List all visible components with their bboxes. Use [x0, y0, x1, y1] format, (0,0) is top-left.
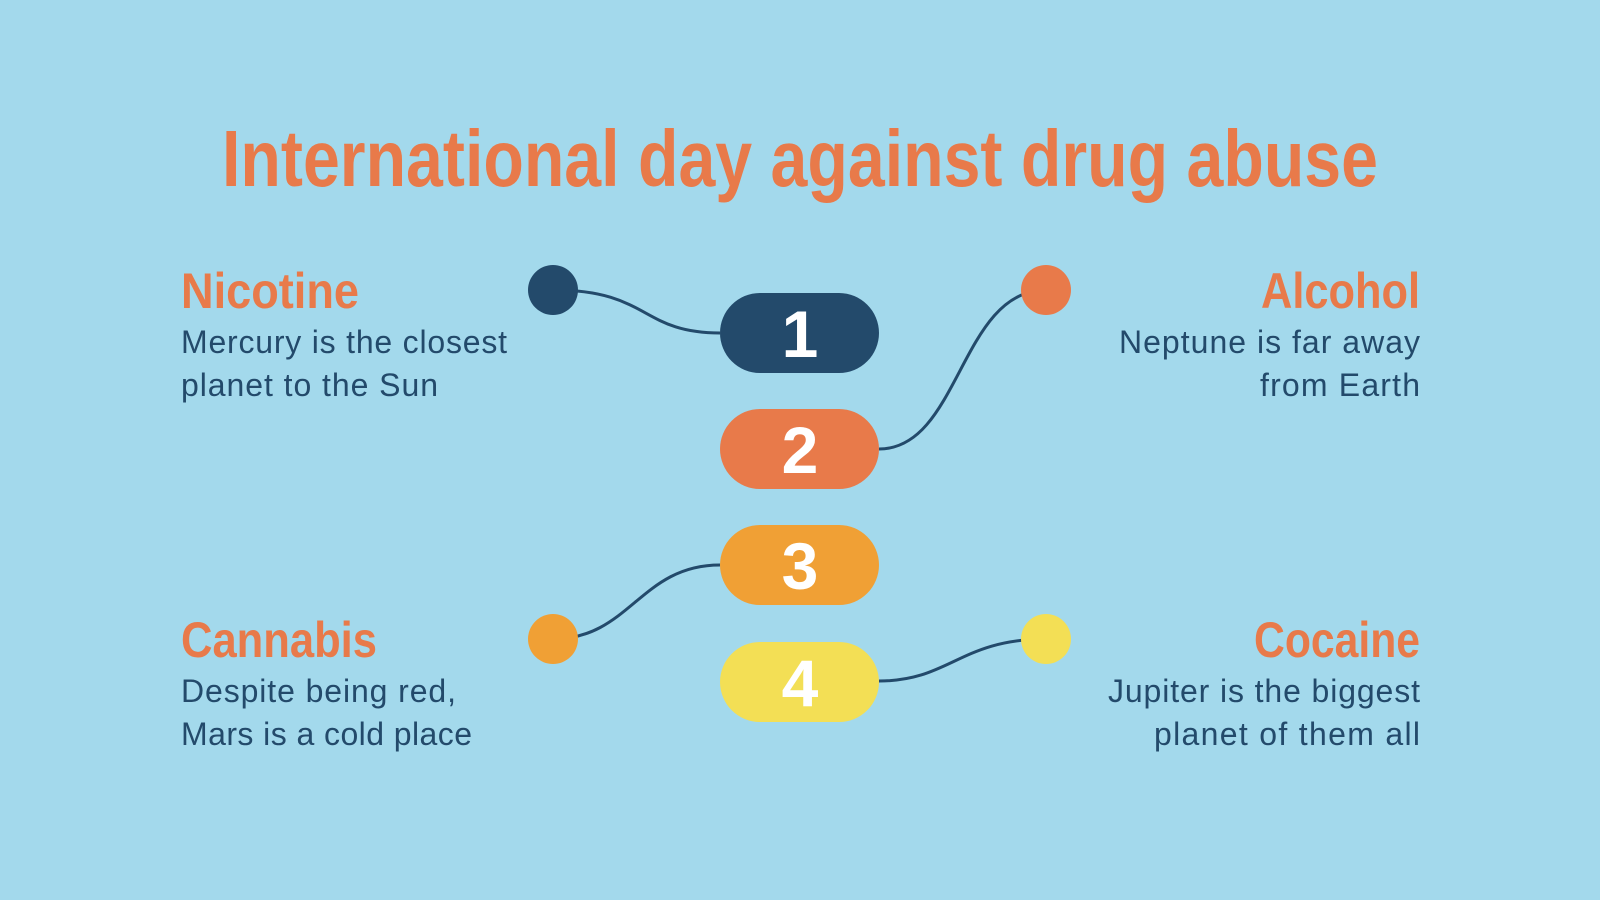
text block: alcohol — [1119, 263, 1420, 403]
text block: cocaine — [1108, 612, 1420, 752]
pill 3 — [720, 525, 879, 605]
text block: cocaine: planet of them all — [1154, 716, 1420, 752]
pill 2: 2 — [782, 413, 818, 487]
text block: alcohol: Neptune is far away — [1119, 324, 1420, 360]
dot: alcohol — [1021, 265, 1071, 315]
pill 2 — [720, 409, 879, 489]
text block: nicotine: Mercury is the closest — [181, 324, 507, 360]
text block: cannabis: Mars is a cold place — [181, 716, 472, 752]
connector: nicotine — [553, 290, 720, 333]
dot: cocaine — [1021, 614, 1071, 664]
pill 3: 3 — [782, 529, 818, 603]
text block: nicotine: planet to the Sun — [181, 367, 438, 403]
text block: cocaine: Jupiter is the biggest — [1108, 673, 1420, 709]
connector: cannabis — [553, 565, 720, 639]
dot: cannabis — [528, 614, 578, 664]
text block: cocaine: Cocaine — [1254, 612, 1420, 668]
pill 4 — [720, 642, 879, 722]
text block: nicotine — [181, 263, 507, 403]
title: International day against drug abuse — [222, 114, 1378, 203]
text block: cannabis: Despite being red, — [181, 673, 456, 709]
text block: cannabis: Cannabis — [181, 612, 377, 668]
connector: cocaine — [879, 639, 1046, 681]
pill 4: 4 — [782, 646, 819, 720]
text block: cannabis — [181, 612, 472, 752]
text block: nicotine: Nicotine — [181, 263, 359, 319]
pill 1 — [720, 293, 879, 373]
connector: alcohol — [879, 290, 1046, 449]
dot: nicotine — [528, 265, 578, 315]
text block: alcohol: from Earth — [1260, 367, 1420, 403]
pill 1: 1 — [782, 297, 818, 371]
text block: alcohol: Alcohol — [1261, 263, 1420, 319]
